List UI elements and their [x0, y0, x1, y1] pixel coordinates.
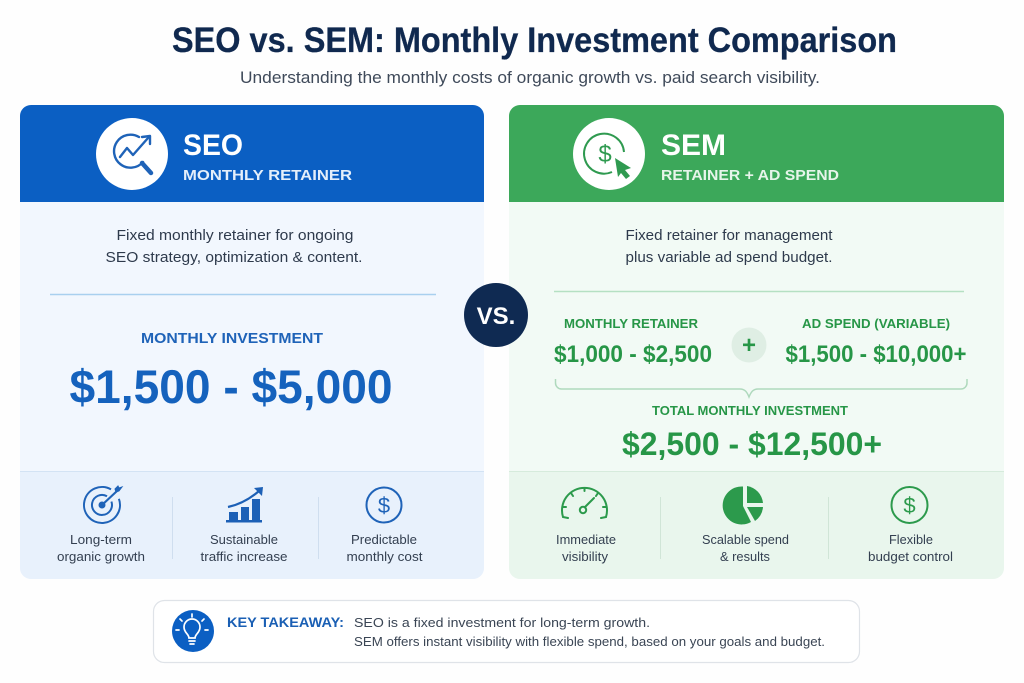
ad spend amount: AD SPEND (VARIABLE) — [802, 316, 950, 331]
SEO panel background — [20, 105, 484, 579]
SEM subheading: RETAINER + AD SPEND — [661, 168, 839, 184]
benefit: predictable cost — [346, 533, 423, 564]
benefit: scalable spend — [702, 533, 789, 564]
key takeaway callout — [154, 600, 860, 662]
icon: dollar circle — [892, 487, 928, 523]
SEO investment label: MONTHLY INVESTMENT — [141, 331, 323, 347]
icon: rising bar chart — [226, 487, 263, 522]
benefit: visibility: Immediate — [556, 533, 616, 547]
SEM heading: SEM — [661, 129, 726, 162]
SEO description — [106, 228, 362, 266]
benefit: traffic increase: Sustainable — [210, 533, 278, 547]
icon: gauge — [562, 488, 607, 518]
SEM description: Fixed retainer for management — [626, 228, 832, 244]
benefit: traffic increase — [200, 533, 288, 564]
benefit: predictable cost: monthly cost — [346, 550, 423, 564]
VS badge: VS. — [477, 303, 515, 330]
icon: target — [84, 486, 122, 523]
panel: SEM — [509, 105, 1004, 579]
benefit: scalable spend: & results — [720, 550, 770, 564]
benefit: long-term growth — [57, 533, 145, 564]
benefit: visibility — [556, 533, 616, 564]
total amount: $2,500 - $12,500+ — [622, 426, 882, 462]
benefit: budget control: budget control — [868, 550, 953, 564]
panel: SEO — [20, 105, 484, 579]
title: SEO vs. SEM: Monthly Investment Comparison — [172, 21, 897, 60]
takeaway text — [354, 615, 825, 649]
icon: pie chart — [723, 486, 763, 524]
SEM panel background — [509, 105, 1004, 579]
plus sign: + — [742, 332, 756, 359]
icon: dollar circle — [366, 488, 402, 522]
SEO investment amount: $1,500 - $5,000 — [70, 360, 392, 413]
retainer amount: $1,000 - $2,500 — [554, 341, 712, 368]
SEM description — [626, 228, 832, 266]
SEO header — [20, 105, 484, 202]
benefit: scalable spend: Scalable spend — [702, 533, 789, 547]
SEO description: Fixed monthly retainer for ongoing — [116, 228, 354, 244]
benefit: traffic increase: traffic increase — [200, 550, 288, 564]
subtitle: Understanding the monthly costs of organic growth vs. paid search visibility. — [240, 68, 820, 87]
total label: TOTAL MONTHLY INVESTMENT — [652, 403, 848, 418]
icon: dollar circle: $ — [903, 493, 916, 518]
SEM benefits band — [509, 472, 1004, 579]
benefit: predictable cost: Predictable — [351, 533, 417, 547]
takeaway label: KEY TAKEAWAY: — [227, 614, 344, 630]
brace — [556, 379, 967, 397]
ad spend amount — [786, 316, 966, 368]
benefit: budget control — [868, 533, 953, 564]
SEO benefits band — [20, 472, 484, 579]
retainer amount — [554, 316, 712, 368]
icon: dollar circle: $ — [378, 493, 390, 518]
benefit: long-term growth: Long-term — [70, 533, 132, 547]
benefit: budget control: Flexible — [889, 533, 933, 547]
ad spend amount: $1,500 - $10,000+ — [786, 341, 966, 368]
icon: dollar with cursor: $ — [598, 141, 612, 168]
benefit: long-term growth: organic growth — [57, 550, 145, 564]
SEM description: plus variable ad spend budget. — [626, 250, 832, 266]
icon: magnifier with growth chart — [96, 118, 168, 190]
takeaway text: SEO is a fixed investment for long-term growth. — [354, 615, 650, 630]
retainer amount: MONTHLY RETAINER — [564, 316, 699, 331]
icon: dollar with cursor — [573, 118, 645, 190]
icon: light bulb — [172, 610, 214, 652]
SEO heading: SEO — [183, 129, 243, 162]
SEM header — [509, 105, 1004, 202]
VS badge — [464, 283, 528, 347]
SEO description: SEO strategy, optimization & content. — [106, 250, 362, 266]
plus sign — [732, 328, 766, 362]
SEO subheading: MONTHLY RETAINER — [183, 168, 353, 184]
benefit: visibility: visibility — [562, 550, 609, 564]
takeaway text: SEM offers instant visibility with flexible spend, based on your goals and budget. — [354, 634, 825, 649]
